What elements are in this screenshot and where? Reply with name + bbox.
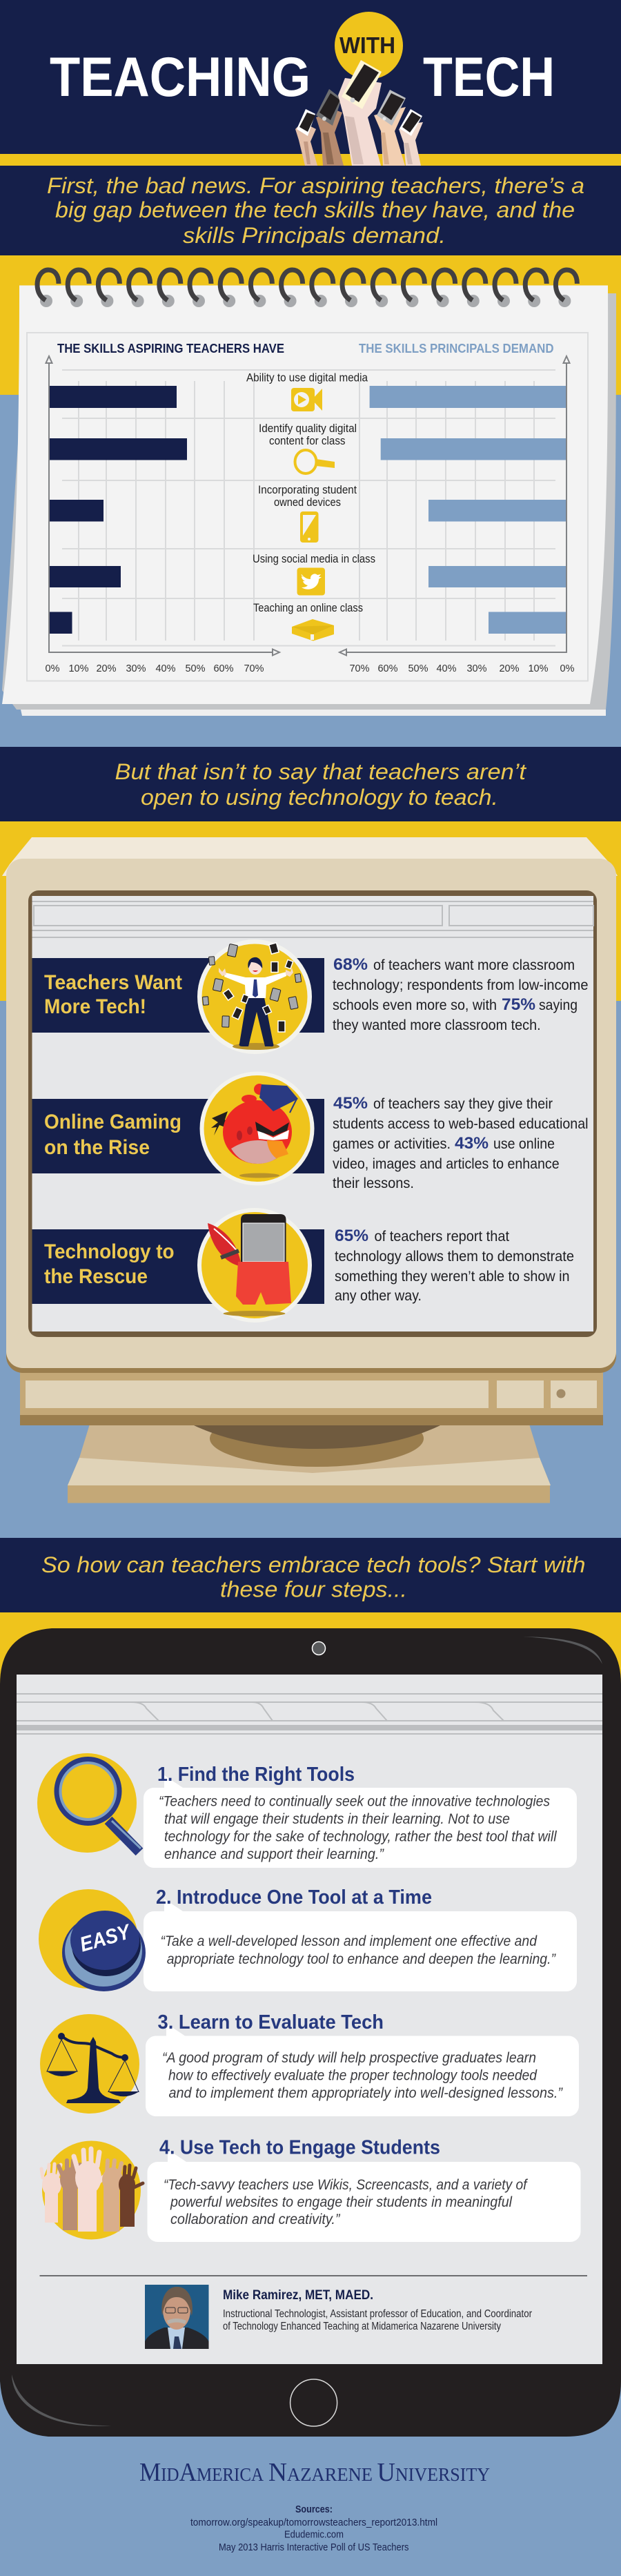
quote bubble: “Teachers need to continually seek out the innovative technologies [159, 1793, 550, 1810]
bar chart: aspiring teachers [50, 386, 187, 634]
icon: teacher juggling devices [197, 939, 312, 1054]
icon: spiral binding rings [37, 270, 577, 307]
step heading: 4. Use Tech to Engage Students [159, 2137, 440, 2159]
stat text: 45 percent: their lessons. [333, 1175, 414, 1191]
step heading: 3. Learn to Evaluate Tech [157, 2011, 384, 2033]
axis tick labels: 40% [436, 663, 457, 674]
intro banner: big gap between the tech skills they have, and the [55, 197, 575, 222]
axis tick labels: 70% [244, 663, 264, 674]
author bio: Instructional Technologist, Assistant professor of Education, and Coordinator [223, 2308, 532, 2320]
stat text: 45 percent: use online [493, 1136, 555, 1152]
bar chart: principals [370, 386, 566, 634]
sources: May 2013 Harris Interactive Poll of US Teachers [219, 2542, 408, 2553]
icon: balance scale [47, 2033, 139, 2103]
stat: online gaming [32, 1071, 588, 1191]
stat text: 45 percent: 45% [333, 1094, 368, 1113]
icon: home button [290, 2379, 337, 2426]
row: digital content: content for class [269, 435, 345, 447]
quote bubble [146, 2024, 579, 2116]
stat: teachers want more tech: Teachers Want [44, 971, 182, 994]
author bio: Mike Ramirez, MET, MAED. [223, 2288, 373, 2303]
quote bubble: “Take a well-developed lesson and implement one effective and [160, 1933, 538, 1949]
stat text: 45 percent: of teachers say they give their [373, 1096, 553, 1112]
icon: hands holding phones [295, 60, 423, 166]
icon: twitter bird [297, 567, 325, 595]
author bio [145, 2285, 532, 2349]
quote bubble: technology for the sake of technology, rather the best tool that will [164, 1829, 558, 1844]
intro banner: First, the bad news. For aspiring teachers, there’s a [47, 173, 584, 198]
panel: desktop computer [2, 837, 618, 1503]
logo: MidAmerica Nazarene University: NAZARENE [268, 2458, 373, 2487]
axis tick labels: 0% [46, 663, 60, 674]
stat: teachers want more tech: More Tech! [44, 995, 146, 1018]
stat: technology to the rescue: the Rescue [44, 1265, 148, 1288]
quote bubble: “A good program of study will help prospective graduates learn [162, 2050, 536, 2066]
icon: magnifier [57, 1759, 141, 1852]
stat text: 68 percent: schools even more so, with [333, 997, 497, 1013]
axis tick labels: 20% [96, 663, 117, 674]
transition banner: open to using technology to teach. [141, 785, 498, 810]
step 2 [39, 1886, 577, 1991]
stat: teachers want more tech [32, 939, 588, 1054]
quote bubble: and to implement them appropriately into well-designed lessons.” [168, 2085, 563, 2101]
icon: book [292, 619, 334, 641]
stat: online gaming: Online Gaming [44, 1111, 181, 1133]
sources: tomorrow.org/speakup/tomorrowsteachers_report2013.html [190, 2517, 437, 2528]
axis tick labels [46, 663, 575, 674]
icon: easy button [62, 1911, 146, 1991]
axis tick labels: 30% [466, 663, 487, 674]
axis tick labels: 70% [349, 663, 370, 674]
panel: tablet [0, 1628, 621, 2437]
sources [190, 2504, 437, 2553]
step heading: 1. Find the Right Tools [157, 1764, 355, 1786]
stat text: 68 percent: saying [539, 997, 578, 1013]
row: student devices: owned devices [274, 496, 341, 509]
stat: technology to the rescue: Technology to [44, 1240, 175, 1263]
panel: notebook chart [2, 270, 616, 716]
sources: Sources: [295, 2504, 333, 2515]
row: online class [253, 602, 363, 641]
title: TECH: TECH [423, 46, 555, 108]
row: student devices: Incorporating student [258, 484, 357, 496]
stat text: 45 percent: students access to web-based educational [333, 1116, 588, 1132]
axis tick labels: 60% [213, 663, 234, 674]
quote bubble: enhance and support their learning.” [164, 1846, 384, 1862]
stat text: 68 percent: technology; respondents from low-income [333, 977, 588, 993]
stat text: 65 percent: 65% [335, 1227, 368, 1245]
intro banner [0, 166, 621, 255]
steps banner [0, 1538, 621, 1612]
quote bubble: appropriate technology tool to enhance and deepen the learning.” [167, 1951, 556, 1967]
row: student devices [258, 484, 357, 543]
axis tick labels: 30% [126, 663, 146, 674]
quote bubble: powerful websites to engage their students in meaningful [170, 2194, 513, 2210]
icon: super phone [197, 1208, 312, 1323]
icon: video camera [291, 388, 322, 411]
intro banner: skills Principals demand. [183, 223, 446, 248]
row: online class: Teaching an online class [253, 602, 363, 614]
logo: MidAmerica Nazarene University: UNIVERSITY [377, 2458, 490, 2487]
stat text: 65 percent: any other way. [335, 1288, 422, 1304]
stat text: 68 percent: 75% [502, 995, 535, 1014]
row: digital content [259, 422, 357, 474]
axis tick labels: 10% [528, 663, 549, 674]
icon: raised hands [41, 2149, 143, 2232]
quote bubble: that will engage their students in their learning. Not to use [164, 1811, 510, 1827]
axis tick labels: 50% [185, 663, 206, 674]
quote bubble: collaboration and creativity.” [170, 2212, 340, 2227]
stat text: 68 percent [333, 955, 588, 1033]
axis tick labels: 50% [408, 663, 428, 674]
axis tick labels: 10% [68, 663, 89, 674]
chart headings [57, 342, 553, 355]
axis tick labels: 20% [499, 663, 520, 674]
chart axes and arrows [46, 356, 570, 656]
steps banner: So how can teachers embrace tech tools? Start with [41, 1552, 585, 1577]
header banner [0, 0, 621, 166]
logo: MidAmerica Nazarene University: MIDAMERICA [139, 2458, 264, 2487]
logo: MidAmerica Nazarene University [139, 2458, 490, 2487]
stat text: 68 percent: they wanted more classroom tech. [333, 1017, 541, 1033]
row: social media: Using social media in class [253, 553, 375, 565]
row: digital media [246, 371, 368, 411]
stat: technology to the rescue [32, 1208, 574, 1323]
quote bubble: how to effectively evaluate the proper technology tools needed [168, 2068, 538, 2083]
step heading: 2. Introduce One Tool at a Time [156, 1886, 432, 1909]
axis tick labels: 60% [377, 663, 398, 674]
stat text: 65 percent [335, 1227, 574, 1304]
row: digital media: Ability to use digital media [246, 371, 368, 384]
stat text: 45 percent [333, 1094, 588, 1191]
chart headings: THE SKILLS PRINCIPALS DEMAND [359, 342, 553, 355]
sources: Edudemic.com [284, 2529, 344, 2540]
axis tick labels: 0% [560, 663, 575, 674]
axis tick labels: 40% [155, 663, 176, 674]
badge: WITH: WITH [339, 32, 395, 58]
stat text: 65 percent: of teachers report that [374, 1229, 509, 1245]
stat text: 65 percent: technology allows them to demonstrate [335, 1249, 574, 1265]
stat: online gaming: on the Rise [44, 1136, 150, 1159]
transition banner [0, 747, 621, 821]
title: TEACHING: TEACHING [50, 46, 310, 108]
row: digital content: Identify quality digital [259, 422, 357, 435]
author bio: of Technology Enhanced Teaching at Midamerica Nazarene University [223, 2321, 501, 2332]
icon: camera [312, 1641, 326, 1655]
stat text: 45 percent: 43% [455, 1134, 489, 1153]
icon: easy button: EASY [77, 1920, 135, 1957]
stat text: 68 percent: of teachers want more classroom [373, 957, 575, 973]
quote bubble [144, 1775, 577, 1868]
photo: author portrait [145, 2285, 208, 2349]
stat text: 45 percent: video, images and articles to enhance [333, 1156, 560, 1172]
quote bubble [144, 1899, 577, 1991]
step 1 [37, 1753, 577, 1868]
monitor base and stand [20, 1370, 603, 1503]
icon: magnifier [295, 450, 335, 474]
icon: angry bird with cap [200, 1071, 315, 1186]
stat text: 68 percent: 68% [333, 955, 368, 974]
step 4 [41, 2137, 581, 2242]
row: social media [253, 553, 375, 595]
icon: phone [300, 511, 319, 543]
chart headings: THE SKILLS ASPIRING TEACHERS HAVE [57, 342, 284, 355]
badge: WITH [335, 12, 403, 79]
stat text: 65 percent: something they weren’t able to show in [335, 1269, 570, 1285]
transition banner: But that isn’t to say that teachers aren’t [115, 759, 526, 784]
stat text: 45 percent: games or activities. [333, 1136, 451, 1152]
quote bubble: “Tech-savvy teachers use Wikis, Screencasts, and a variety of [164, 2177, 528, 2193]
quote bubble [148, 2149, 581, 2242]
steps banner: these four steps... [220, 1577, 407, 1602]
step 3 [40, 2011, 579, 2116]
